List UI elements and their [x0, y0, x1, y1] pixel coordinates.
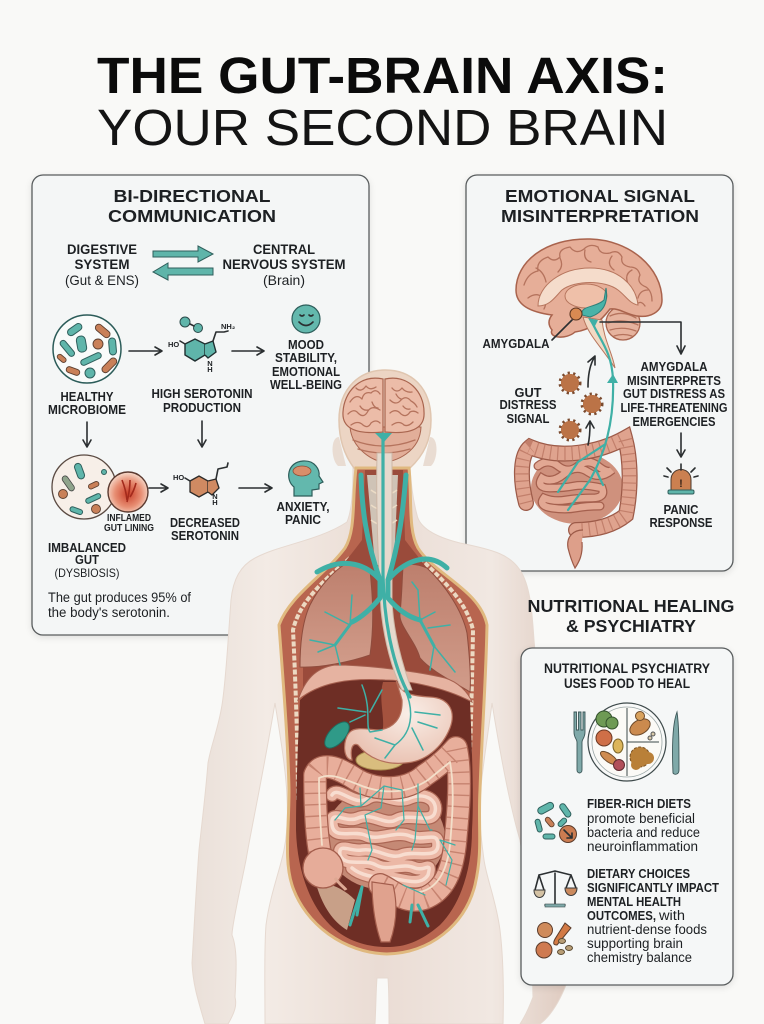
label: gut distress signal: [500, 386, 556, 426]
panel: emotional signal misinterpretation: [466, 175, 733, 573]
icon: serotonin molecule: H: [207, 365, 213, 374]
icon: head with anxious brain: [289, 461, 323, 496]
heading: emotional signal misinterpretation: [501, 186, 699, 226]
text: fiber-rich diets: neuroinflammation: [587, 839, 698, 854]
appendix: [335, 878, 346, 890]
panel: nutritional healing and psychiatry: [521, 596, 734, 987]
text: dietary choices: with: [658, 908, 685, 923]
arrow: [232, 347, 264, 355]
text: dietary choices: OUTCOMES,: [587, 909, 656, 923]
rectum: [372, 882, 396, 942]
abdominal cavity: [296, 678, 473, 947]
pancreas: [356, 750, 404, 770]
head skin: [339, 370, 431, 468]
label: high serotonin production: [152, 387, 252, 415]
arrow: [129, 347, 162, 355]
label: high serotonin production: PRODUCTION: [163, 401, 241, 415]
icon: serotonin molecule: HO: [168, 340, 179, 349]
label: central nervous system: CENTRAL: [253, 241, 315, 257]
arrow: [83, 422, 91, 447]
illustration: gut: [522, 438, 630, 568]
gut nerve network: [335, 784, 455, 895]
liver nerves: [338, 685, 382, 732]
label: healthy microbiome: [48, 390, 126, 417]
pelvic floor: [315, 880, 355, 930]
icon: bacteria: [535, 801, 576, 842]
heading: bi-directional communication: BI-DIRECTIONAL: [114, 186, 271, 206]
heading: emotional signal misinterpretation: MISINTERPRETATION: [501, 206, 699, 226]
label: panic response: RESPONSE: [650, 516, 712, 530]
label: imbalanced gut: IMBALANCED: [48, 541, 126, 555]
title: THE GUT-BRAIN AXIS:: [97, 47, 668, 104]
label: anxiety, panic: PANIC: [285, 513, 321, 527]
label: healthy microbiome: HEALTHY: [60, 390, 114, 404]
title: YOUR SECOND BRAIN: [97, 99, 668, 156]
icon: serotonin molecule: N: [207, 359, 213, 368]
text: serotonin fact: the body's serotonin.: [48, 605, 170, 620]
arrow: [677, 433, 685, 457]
arrow: [198, 421, 206, 447]
text: amygdala misinterprets: EMERGENCIES: [632, 415, 716, 429]
heading: emotional signal misinterpretation: EMOTIONAL SIGNAL: [505, 186, 695, 206]
label: panic response: PANIC: [664, 503, 698, 517]
icon: alarm: [664, 464, 698, 494]
text: dietary choices: nutrient-dense foods: [587, 922, 707, 937]
label: imbalanced gut: (DYSBIOSIS): [54, 566, 120, 580]
diaphragm: [298, 665, 472, 702]
icon: nutrient-dense foods: [536, 922, 572, 958]
subheading: food to heal: [544, 661, 710, 691]
label: mood stability: [270, 338, 342, 392]
icon: balance scale: [534, 871, 577, 907]
pelvic nerves: [350, 887, 428, 926]
label: amygdala: [482, 320, 572, 351]
icon: alarm: !: [679, 478, 683, 490]
text: fiber-rich diets: bacteria and reduce: [587, 825, 700, 840]
heading: nutritional healing: [528, 596, 734, 636]
text: fiber-rich diets: [587, 797, 700, 854]
label: mood stability: WELL-BEING: [270, 378, 342, 392]
label: decreased serotonin: [170, 516, 240, 543]
text: dietary choices: [587, 867, 719, 965]
text: serotonin fact: The gut produces 95% of: [48, 590, 191, 605]
label: mood stability: STABILITY,: [275, 351, 337, 365]
text: dietary choices: DIETARY CHOICES: [587, 867, 690, 881]
thorax cavity: [303, 470, 465, 700]
label: anxiety, panic: [276, 500, 330, 527]
arrows: upward signal: [586, 356, 595, 445]
rib strip: [293, 558, 473, 800]
subheading: food to heal: NUTRITIONAL PSYCHIATRY: [544, 661, 710, 676]
label: gut distress signal: DISTRESS: [500, 398, 556, 412]
label: mood stability: MOOD: [288, 338, 324, 352]
label: central nervous system: NERVOUS SYSTEM: [222, 256, 346, 272]
small intestine: [325, 786, 445, 890]
subheading: food to heal: USES FOOD TO HEAL: [564, 676, 690, 691]
panel: bi-directional communication: [32, 175, 369, 637]
text: amygdala misinterprets: AMYGDALA: [640, 360, 708, 374]
neck strap nerves: [371, 490, 397, 525]
label: digestive system: (Gut & ENS): [65, 272, 139, 288]
text: amygdala misinterprets: MISINTERPRETS: [627, 374, 721, 388]
icon: healthy microbiome: [53, 315, 121, 383]
left lung: [300, 563, 373, 667]
text: serotonin fact: [48, 590, 191, 620]
nerve: gut to brain signal: [558, 318, 618, 510]
text: fiber-rich diets: FIBER-RICH DIETS: [587, 797, 691, 811]
icon: serotonin molecule: NH₂: [221, 322, 235, 331]
label: high serotonin production: HIGH SEROTONIN: [152, 387, 252, 401]
brain: [343, 378, 424, 462]
heading: nutritional healing: & PSYCHIATRY: [566, 616, 696, 636]
label: decreased serotonin: SEROTONIN: [171, 529, 239, 543]
arrow: [239, 484, 272, 492]
lung nerve branches: [310, 582, 455, 672]
icon: decreased serotonin molecule: N: [212, 492, 218, 501]
illustration: brain sagittal section: [516, 239, 662, 368]
label: mood stability: EMOTIONAL: [272, 365, 340, 379]
icon: imbalanced gut: [52, 455, 148, 519]
label: anxiety, panic: ANXIETY,: [276, 500, 330, 514]
trachea: [367, 475, 398, 565]
heading: nutritional healing: NUTRITIONAL HEALING: [528, 596, 734, 616]
label: amygdala: AMYGDALA: [482, 337, 550, 351]
label: gut distress signal: GUT: [514, 386, 542, 400]
vagus nerve: [317, 433, 447, 697]
label: gut distress signal: SIGNAL: [506, 412, 550, 426]
icon: plate of food: [588, 703, 666, 781]
icon: knife: [672, 712, 679, 774]
label: digestive system: SYSTEM: [74, 256, 130, 272]
arrows: two-way communication: [153, 246, 213, 280]
text: dietary choices: chemistry balance: [587, 950, 692, 965]
label: decreased serotonin: DECREASED: [170, 516, 240, 530]
torso opening: [279, 468, 487, 954]
stomach nerves: [375, 690, 440, 758]
label: digestive system: [65, 241, 139, 288]
label: inflamed gut lining: GUT LINING: [104, 523, 154, 534]
text: fiber-rich diets: promote beneficial: [587, 811, 695, 826]
spleen: [381, 682, 405, 733]
colon: [315, 748, 459, 900]
text: dietary choices: MENTAL HEALTH: [587, 895, 681, 909]
heading: bi-directional communication: [108, 186, 276, 226]
title: [97, 47, 668, 156]
text: amygdala misinterprets: LIFE-THREATENING: [620, 401, 728, 415]
stomach: [345, 680, 452, 763]
text: dietary choices: supporting brain: [587, 936, 683, 951]
label: inflamed gut lining: [104, 513, 154, 534]
icon: decreased serotonin molecule: [173, 463, 228, 507]
icon: decreased serotonin molecule: H: [212, 498, 218, 507]
text: amygdala misinterprets: [620, 360, 728, 429]
text: dietary choices: SIGNIFICANTLY IMPACT: [587, 881, 719, 895]
text: amygdala misinterprets: GUT DISTRESS AS: [623, 387, 725, 401]
label: central nervous system: (Brain): [263, 272, 305, 288]
label: imbalanced gut: [48, 541, 126, 580]
central body figure: [192, 370, 567, 1024]
label: digestive system: DIGESTIVE: [67, 241, 137, 257]
heading: bi-directional communication: COMMUNICATION: [108, 206, 276, 226]
label: healthy microbiome: MICROBIOME: [48, 403, 126, 417]
label: imbalanced gut: GUT: [75, 553, 99, 567]
arrow: [149, 484, 168, 492]
arrow: amygdala to misinterpretation: [600, 322, 685, 354]
cecum: [303, 848, 343, 888]
gallbladder: [320, 718, 354, 752]
label: central nervous system: [222, 241, 346, 288]
spinal cord: [377, 453, 412, 690]
label: panic response: [650, 503, 712, 530]
icon: serotonin molecule: [168, 317, 235, 374]
icon: decreased serotonin molecule: HO: [173, 473, 184, 482]
label: inflamed gut lining: INFLAMED: [107, 513, 151, 524]
ears: [332, 437, 436, 466]
right lung: [400, 564, 470, 692]
icons: gut distress signals: [561, 374, 601, 439]
icon: smiley face: [292, 305, 320, 333]
icon: fork: [574, 712, 585, 773]
